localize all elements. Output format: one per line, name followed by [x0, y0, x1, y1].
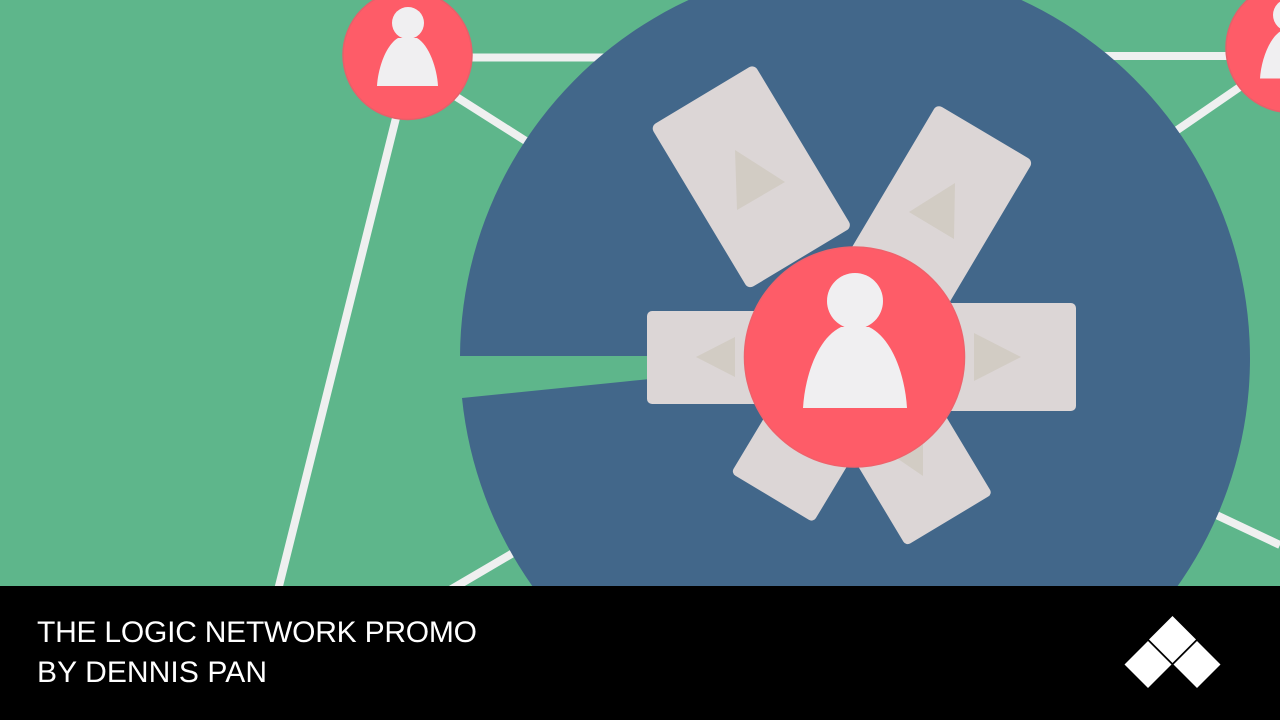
- network connection lines: [278, 56, 1280, 590]
- card: bottom right: [849, 400, 993, 546]
- caption author: BY DENNIS PAN: [37, 656, 267, 689]
- logo: diamonds: [1124, 616, 1220, 688]
- person node: top left: [343, 0, 472, 120]
- card: right: [930, 303, 1076, 411]
- card: top right: [825, 104, 1033, 350]
- person node: top right: [1226, 0, 1280, 112]
- caption title: THE LOGIC NETWORK PROMO: [37, 616, 477, 649]
- large blue circle with wedge: [460, 0, 1250, 720]
- card: bottom left: [731, 387, 865, 522]
- caption bar: [0, 586, 1280, 720]
- media cards: [647, 64, 1076, 546]
- central person node: [744, 247, 964, 467]
- card: top left: [650, 64, 852, 289]
- card: left: [647, 311, 777, 404]
